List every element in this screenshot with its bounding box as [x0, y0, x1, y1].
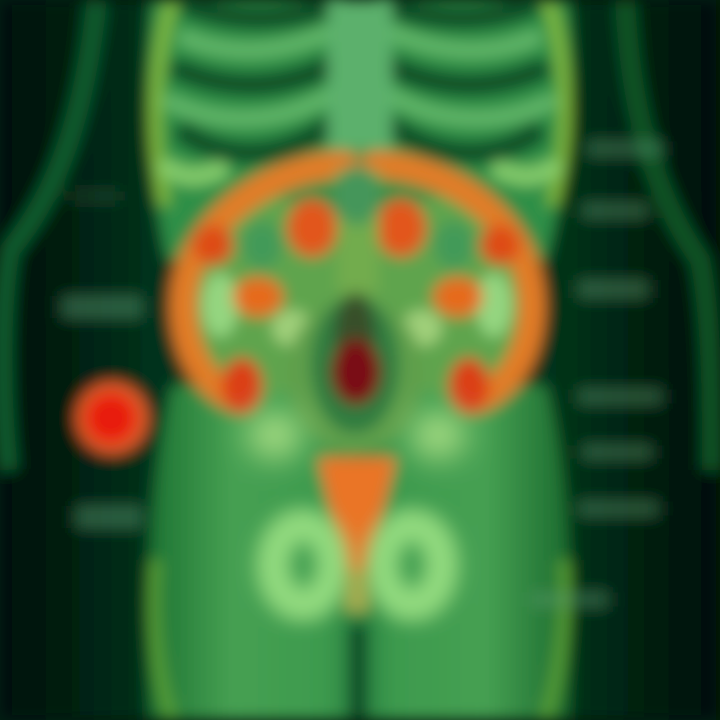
- central bladder: [287, 293, 423, 453]
- pelvic light lobes: [273, 525, 442, 605]
- light ribs: [170, 30, 550, 119]
- upper torso: [148, 0, 571, 260]
- blurred left labels: [62, 190, 142, 528]
- red-orange kidney nodes: [193, 199, 520, 414]
- lower dark midline: [349, 625, 367, 720]
- spine: [328, 0, 392, 150]
- dark rib gaps: [180, 5, 540, 153]
- lower torso: [148, 385, 570, 720]
- red marker dot: [76, 382, 148, 454]
- pelvic centre stem: [345, 570, 369, 612]
- ribs: [168, 5, 552, 176]
- blurred right labels: [532, 141, 663, 607]
- light kidney cavities: [202, 221, 512, 346]
- kidney interior: [178, 195, 346, 395]
- light glow beside bladder: [247, 411, 466, 459]
- central ureter column: [334, 165, 380, 295]
- side body outlines: [2, 0, 712, 470]
- kidney shape: orange outer arcs: [183, 165, 532, 400]
- torso edge highlights: [154, 0, 565, 720]
- lower orange funnel: [318, 458, 396, 590]
